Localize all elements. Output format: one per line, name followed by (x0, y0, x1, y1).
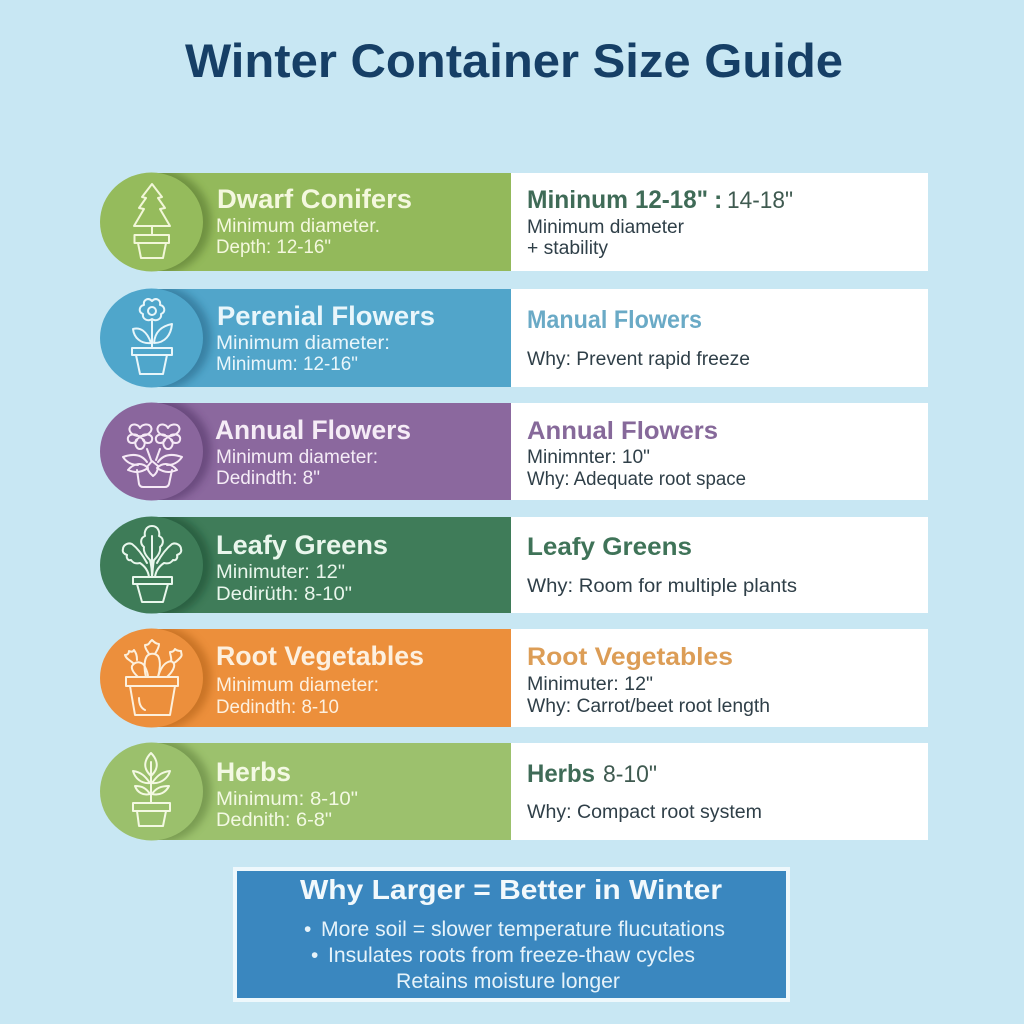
detail card: leafy greens (511, 517, 928, 613)
detail card: dwarf conifers: : (714, 186, 722, 214)
row: leafy greens (100, 513, 928, 617)
detail card: leafy greens: Why: Room for multiple plants (527, 576, 797, 597)
label: root vegetables: Root Vegetables (216, 641, 424, 671)
callout heading: Why Larger = Better in Winter (300, 874, 722, 905)
colour bar: perennial flowers (100, 286, 511, 390)
label: leafy greens: Leafy Greens (216, 530, 388, 560)
label: herbs: Dednith: 6-8" (216, 810, 332, 831)
label: annual flowers: Annual Flowers (215, 415, 411, 445)
detail card: annual flowers: Annual Flowers (527, 417, 718, 445)
callout bullet list (304, 918, 725, 993)
label: perennial flowers: Perenial Flowers (217, 301, 435, 331)
row: annual flowers (100, 399, 928, 503)
icon: flower in pot (132, 299, 172, 374)
label: perennial flowers (216, 301, 435, 375)
detail card: herbs (511, 743, 928, 840)
label: leafy greens: Dedirüth: 8-10" (216, 584, 352, 605)
colour bar: dwarf conifers (100, 170, 511, 274)
detail card: root vegetables: Root Vegetables (527, 643, 733, 671)
detail card: dwarf conifers: Mininum (527, 186, 628, 214)
callout bullet list: More soil = slower temperature flucutations (321, 918, 725, 941)
label: herbs: Herbs (216, 757, 291, 787)
detail card: dwarf conifers: + stability (527, 238, 609, 259)
detail card: dwarf conifers (511, 173, 928, 271)
row: perennial flowers (100, 286, 928, 390)
icon: herb in pot (133, 753, 170, 826)
callout bullet list: • (311, 944, 318, 967)
label: perennial flowers: Minimum: 12-16" (216, 354, 358, 375)
label: dwarf conifers: Dwarf Conifers (217, 184, 412, 214)
icon: pansies in pot (123, 424, 182, 487)
detail card: perennial flowers (511, 289, 928, 387)
detail card: root vegetables: Minimuter: 12" (527, 674, 653, 695)
label: herbs: Minimum: 8-10" (216, 789, 358, 810)
label: herbs (216, 757, 358, 831)
detail card: annual flowers: Minimnter: 10" (527, 447, 650, 468)
label: root vegetables: Dedindth: 8-10 (216, 697, 339, 718)
label: leafy greens: Minimuter: 12" (216, 562, 345, 583)
label: dwarf conifers: Minimum diameter. (216, 216, 380, 237)
detail card: dwarf conifers: 12-18" (635, 186, 708, 214)
icon: leafy greens in pot (123, 526, 181, 602)
colour bar: leafy greens (100, 513, 511, 617)
row: root vegetables (100, 626, 928, 730)
detail card: herbs: 8-10" (603, 761, 657, 788)
callout bullet list: Retains moisture longer (396, 970, 620, 993)
label: annual flowers: Dedindth: 8" (216, 468, 320, 489)
icon: conifer in pot (134, 184, 170, 258)
callout: why larger is better in winter (235, 869, 788, 1000)
detail card: dwarf conifers: Minimum diameter (527, 217, 685, 238)
row: herbs (100, 739, 928, 843)
detail card: herbs: Herbs (527, 760, 595, 788)
colour bar: annual flowers (100, 399, 511, 503)
detail card: leafy greens: Leafy Greens (527, 533, 692, 561)
detail card: root vegetables (511, 629, 928, 727)
label: dwarf conifers (216, 184, 412, 258)
callout bullet list: • (304, 918, 311, 941)
label: root vegetables: Minimum diameter: (216, 675, 379, 696)
detail card: perennial flowers: Why: Prevent rapid freeze (527, 349, 750, 370)
label: root vegetables (216, 641, 424, 718)
detail card: root vegetables: Why: Carrot/beet root length (527, 696, 770, 717)
label: annual flowers: Minimum diameter: (216, 447, 378, 468)
detail card: perennial flowers: Manual Flowers (527, 306, 702, 334)
label: annual flowers (215, 415, 411, 489)
detail card: herbs: Why: Compact root system (527, 802, 762, 823)
label: dwarf conifers: Depth: 12-16" (216, 237, 331, 258)
label: perennial flowers: Minimum diameter: (216, 333, 390, 354)
colour bar: herbs (100, 739, 511, 843)
title: Winter Container Size Guide (185, 34, 843, 87)
callout bullet list: Insulates roots from freeze-thaw cycles (328, 944, 695, 967)
colour bar: root vegetables (100, 626, 511, 730)
icon: carrots in pot (125, 640, 182, 715)
detail card: annual flowers (511, 403, 928, 500)
label: leafy greens (216, 530, 388, 605)
detail card: annual flowers: Why: Adequate root space (527, 469, 746, 490)
detail card: dwarf conifers: 14-18" (727, 187, 793, 214)
row: dwarf conifers (100, 170, 928, 274)
